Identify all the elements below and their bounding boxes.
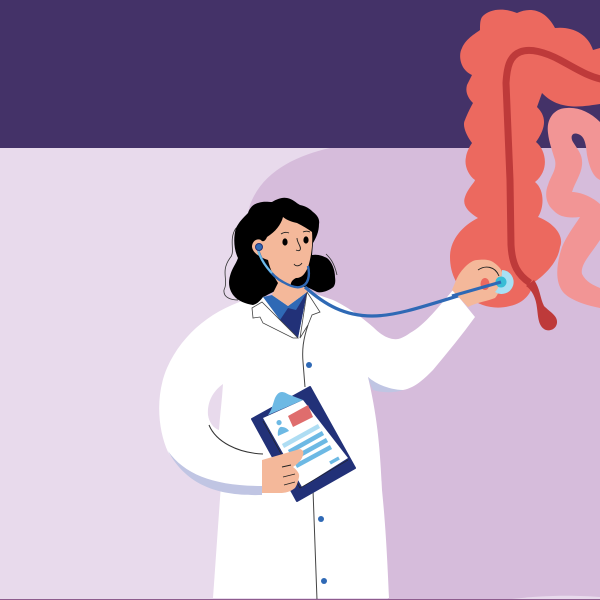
inner colon line and rectal drop <box>506 50 600 330</box>
sleeve shadow <box>168 451 262 495</box>
clipboard paper edge <box>263 421 348 488</box>
lab coat <box>159 290 475 600</box>
text lines <box>283 426 339 466</box>
small intestine <box>546 108 600 308</box>
arm gap <box>208 384 223 430</box>
coat collar <box>252 292 320 338</box>
clipboard clip <box>268 392 303 415</box>
clipboard <box>252 387 355 501</box>
hair <box>229 198 335 305</box>
stethoscope <box>256 244 500 316</box>
person icon <box>276 420 289 436</box>
hair flyaway strands <box>224 228 337 300</box>
stethoscope chest piece <box>452 270 514 296</box>
shirt <box>263 292 307 338</box>
elbow shadow on right arm <box>368 377 403 392</box>
arm crease <box>209 425 263 454</box>
bottom edge line <box>0 599 600 600</box>
background blob: darker lilac <box>246 148 600 600</box>
buttons <box>306 362 327 584</box>
bottom highlight <box>505 596 600 600</box>
hand holding clipboard <box>262 449 303 493</box>
header band <box>0 0 600 148</box>
face and neck <box>252 217 312 306</box>
coat opening line <box>303 325 317 600</box>
large intestine <box>450 10 600 308</box>
hand holding stethoscope <box>452 260 502 307</box>
red photo block <box>288 405 313 427</box>
facial features <box>281 231 310 266</box>
